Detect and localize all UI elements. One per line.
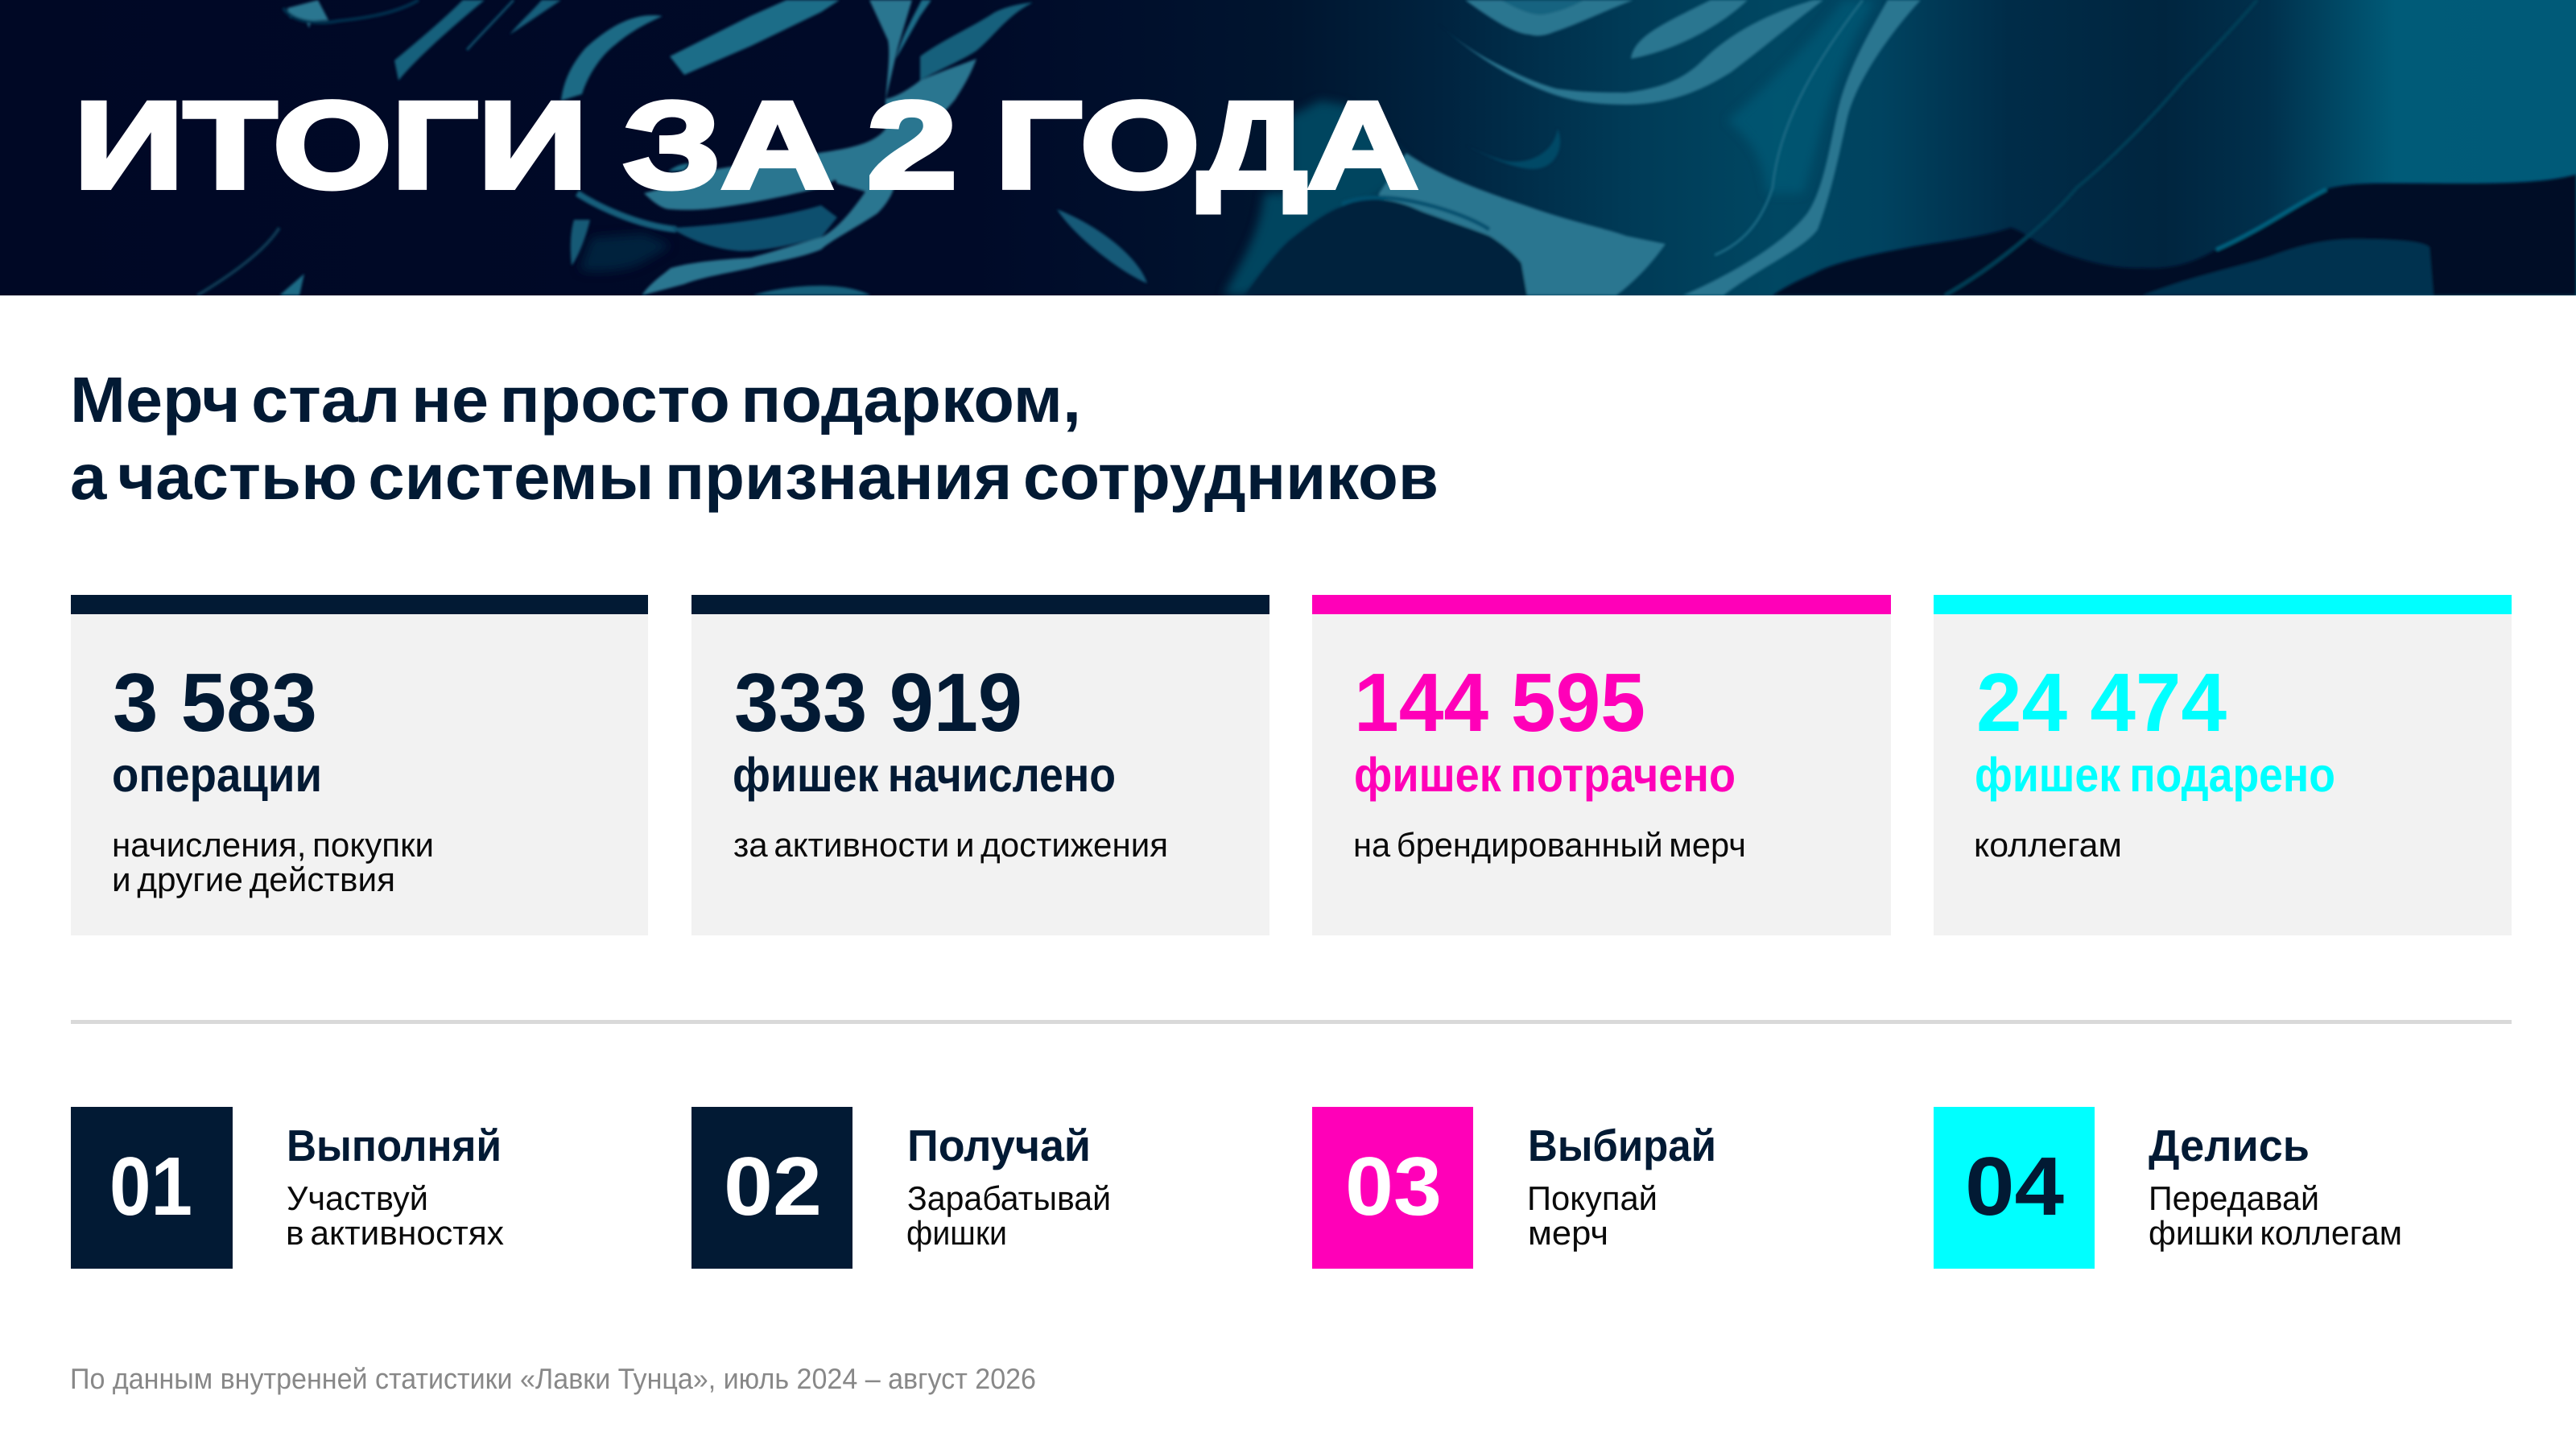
label: spent: фишек потрачено <box>1354 748 1736 802</box>
label: operations: операции <box>112 748 322 802</box>
title: ИТОГИ <box>74 76 588 214</box>
streaks top left <box>394 0 485 80</box>
step text 03: Покупай <box>1527 1179 1657 1217</box>
number box 01: 01 <box>109 1140 192 1232</box>
step text 02: Получай <box>907 1121 1091 1170</box>
label: accrued: фишек начислено <box>733 748 1116 802</box>
step text 04: фишки коллегам <box>2149 1214 2402 1252</box>
step 04 <box>1934 1107 2402 1269</box>
step text 01: Участвуй <box>287 1179 428 1217</box>
step text 02 <box>906 1121 1111 1252</box>
header banner <box>0 0 2576 295</box>
panel: gifted <box>1934 595 2512 935</box>
description: spent: на брендированный мерч <box>1353 826 1746 864</box>
step 01 <box>71 1107 504 1269</box>
description: accrued: за активности и достижения <box>733 826 1168 864</box>
panel: operations <box>71 595 648 935</box>
panel: spent <box>1312 595 1891 935</box>
leaf <box>1057 209 1147 283</box>
footnote: По данным внутренней статистики «Лавки Тунца», июль 2024 – август 2026 <box>70 1362 1036 1395</box>
stat: 144 595: 144 595 <box>1354 656 1645 749</box>
description: operations: начисления, покупки <box>112 826 434 864</box>
number box 04 <box>1934 1107 2095 1269</box>
stat: 24 474: 24 474 <box>1976 656 2227 749</box>
number box 03: 03 <box>1345 1140 1442 1232</box>
step text 02: Зарабатывай <box>907 1179 1111 1217</box>
number box 02 <box>691 1107 852 1269</box>
top right swirls <box>1465 0 1633 35</box>
stat: 333 919: 333 919 <box>734 656 1022 749</box>
step text 04: Передавай <box>2149 1179 2319 1217</box>
number box 04: 04 <box>1965 1140 2064 1232</box>
stat: 3 583: 3 583 <box>113 656 317 749</box>
number box 01 <box>71 1107 233 1269</box>
step text 01 <box>286 1121 504 1252</box>
title: ЗА <box>623 76 834 214</box>
step text 04: Делись <box>2149 1121 2310 1170</box>
step text 01: Выполняй <box>287 1121 502 1170</box>
dark arch <box>1245 200 1527 295</box>
step text 03 <box>1527 1121 1716 1252</box>
number box 02: 02 <box>724 1140 822 1232</box>
step text 02: фишки <box>906 1214 1007 1252</box>
centre swirl <box>869 0 912 101</box>
step text 04 <box>2149 1121 2402 1252</box>
title: ГОДА <box>995 76 1418 214</box>
panel: accrued <box>691 595 1269 935</box>
description: operations <box>112 826 434 898</box>
abstract marble background <box>197 0 2576 295</box>
label: gifted: фишек подарено <box>1975 748 2335 802</box>
light teal slab <box>1368 153 1666 295</box>
description: gifted: коллегам <box>1974 826 2122 864</box>
description: operations: и другие действия <box>112 861 395 898</box>
step text 03: мерч <box>1528 1214 1608 1252</box>
central band <box>1682 0 1921 295</box>
headline: а частью системы признания сотрудников <box>70 441 1439 513</box>
headline: Мерч стал не просто подарком, <box>70 364 1081 436</box>
headline <box>70 364 1439 513</box>
step 03 <box>1312 1107 1716 1269</box>
dark lower wave <box>1773 175 2576 295</box>
step text 03: Выбирай <box>1528 1121 1716 1170</box>
step 02 <box>691 1107 1111 1269</box>
number box 03 <box>1312 1107 1473 1269</box>
title <box>74 76 1418 214</box>
title: 2 <box>867 76 957 214</box>
step text 01: в активностях <box>286 1214 504 1252</box>
